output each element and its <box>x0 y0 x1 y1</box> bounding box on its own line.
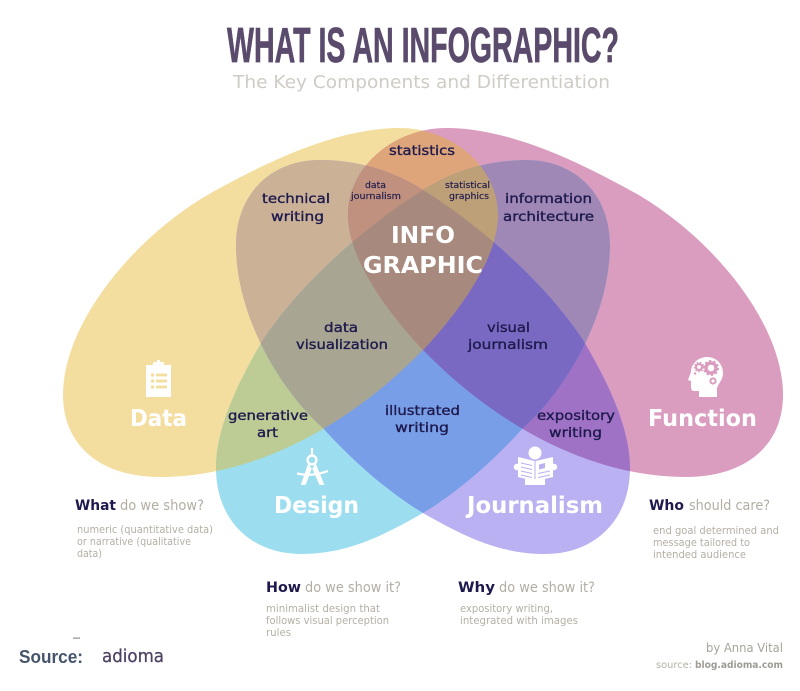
label: generative art: art <box>257 426 278 441</box>
text block: What: data) <box>77 548 102 560</box>
region: statistical graphics <box>423 166 498 350</box>
region: data visualization <box>261 242 423 428</box>
region: data journalism <box>348 166 494 350</box>
label: illustrated writing: illustrated <box>385 404 460 419</box>
text block: Why <box>458 580 595 627</box>
venn diagram <box>63 128 783 554</box>
text block: Why: Why <box>458 580 495 596</box>
label: information architecture: information <box>505 192 592 207</box>
region: information architecture <box>423 160 610 344</box>
text block: Who: should care? <box>689 498 770 514</box>
region: technical writing <box>236 160 366 344</box>
label: generative art: generative <box>228 409 308 424</box>
text block: What: What <box>75 498 116 514</box>
label: information architecture: architecture <box>503 210 594 225</box>
label: data journalism: journalism <box>350 192 401 202</box>
label: visual journalism <box>467 321 548 353</box>
credit: source url <box>656 660 783 671</box>
text block: Who: end goal determined and <box>653 525 779 537</box>
label: technical writing <box>262 192 330 225</box>
label: technical writing: technical <box>262 192 330 207</box>
region: infographic centre <box>352 190 494 350</box>
heading: Function: Function <box>648 406 757 432</box>
text block: Why: integrated with images <box>460 615 578 627</box>
label: statistical graphics: statistical <box>445 181 490 191</box>
region: generative art <box>216 344 324 472</box>
text block: Who: Who <box>649 498 684 514</box>
subtitle: The Key Components and Differentiation <box>232 72 610 93</box>
label: data journalism: data <box>365 181 386 191</box>
petal: Data <box>63 128 498 477</box>
label: statistics: statistics <box>389 144 455 159</box>
icon: head with gears <box>688 357 723 397</box>
text block: What: numeric (quantitative data) <box>77 524 213 536</box>
icon: newspaper reader <box>514 446 557 485</box>
label: technical writing: writing <box>271 210 324 225</box>
text block: What: do we show? <box>120 498 204 514</box>
label: visual journalism: journalism <box>467 338 548 353</box>
label: statistical graphics <box>445 181 490 202</box>
credit: source url: source: <box>656 660 692 671</box>
region: visual journalism <box>423 242 585 429</box>
text block: How: minimalist design that <box>266 603 380 615</box>
region: illustrated writing <box>261 242 585 513</box>
text block: What: or narrative (qualitative <box>77 536 191 548</box>
heading: Design: Design <box>274 493 359 519</box>
icon: clipboard <box>146 360 171 397</box>
petal: Design <box>216 160 610 554</box>
credit: source url: blog.adioma.com <box>695 660 783 671</box>
text block: How: do we show it? <box>305 580 401 596</box>
label: data visualization: data <box>324 321 358 336</box>
label: INFO GRAPHIC: INFO <box>391 223 455 249</box>
label: expository writing: writing <box>549 426 602 441</box>
text block: What <box>75 498 213 560</box>
region: expository writing <box>348 166 630 472</box>
label: data visualization <box>296 321 388 353</box>
text block: Why: do we show it? <box>499 580 595 596</box>
heading: Data: Data <box>130 406 187 432</box>
label: expository writing <box>537 409 615 441</box>
petal: Function <box>348 128 783 477</box>
label: generative art <box>228 409 308 441</box>
text block: How: How <box>266 580 301 596</box>
label: information architecture <box>503 192 594 225</box>
petal: Journalism <box>236 160 630 554</box>
label: illustrated writing <box>385 404 460 436</box>
text block: Who: intended audience <box>653 549 746 561</box>
region: statistics <box>366 130 480 190</box>
label: INFO GRAPHIC <box>363 223 483 279</box>
label: data journalism <box>350 181 401 202</box>
label: visual journalism: visual <box>487 321 530 336</box>
text block: How: rules <box>266 627 291 639</box>
label: expository writing: expository <box>537 409 615 424</box>
label: INFO GRAPHIC: GRAPHIC <box>363 253 483 279</box>
text block: Why: expository writing, <box>460 603 553 615</box>
label: illustrated writing: writing <box>395 421 449 436</box>
icon: compass <box>297 448 328 484</box>
text block: How <box>266 580 401 639</box>
label: statistical graphics: graphics <box>449 192 489 202</box>
text block: Who: message tailored to <box>653 537 750 549</box>
footer: Source label: Source: <box>19 647 83 667</box>
footer: adioma logo: adioma <box>102 646 164 667</box>
credit: by Anna Vital: by Anna Vital <box>706 641 783 655</box>
text block: Who <box>649 498 779 561</box>
heading: Journalism: Journalism <box>465 493 603 519</box>
label: data visualization: visualization <box>296 338 388 353</box>
text block: How: follows visual perception <box>266 615 389 627</box>
